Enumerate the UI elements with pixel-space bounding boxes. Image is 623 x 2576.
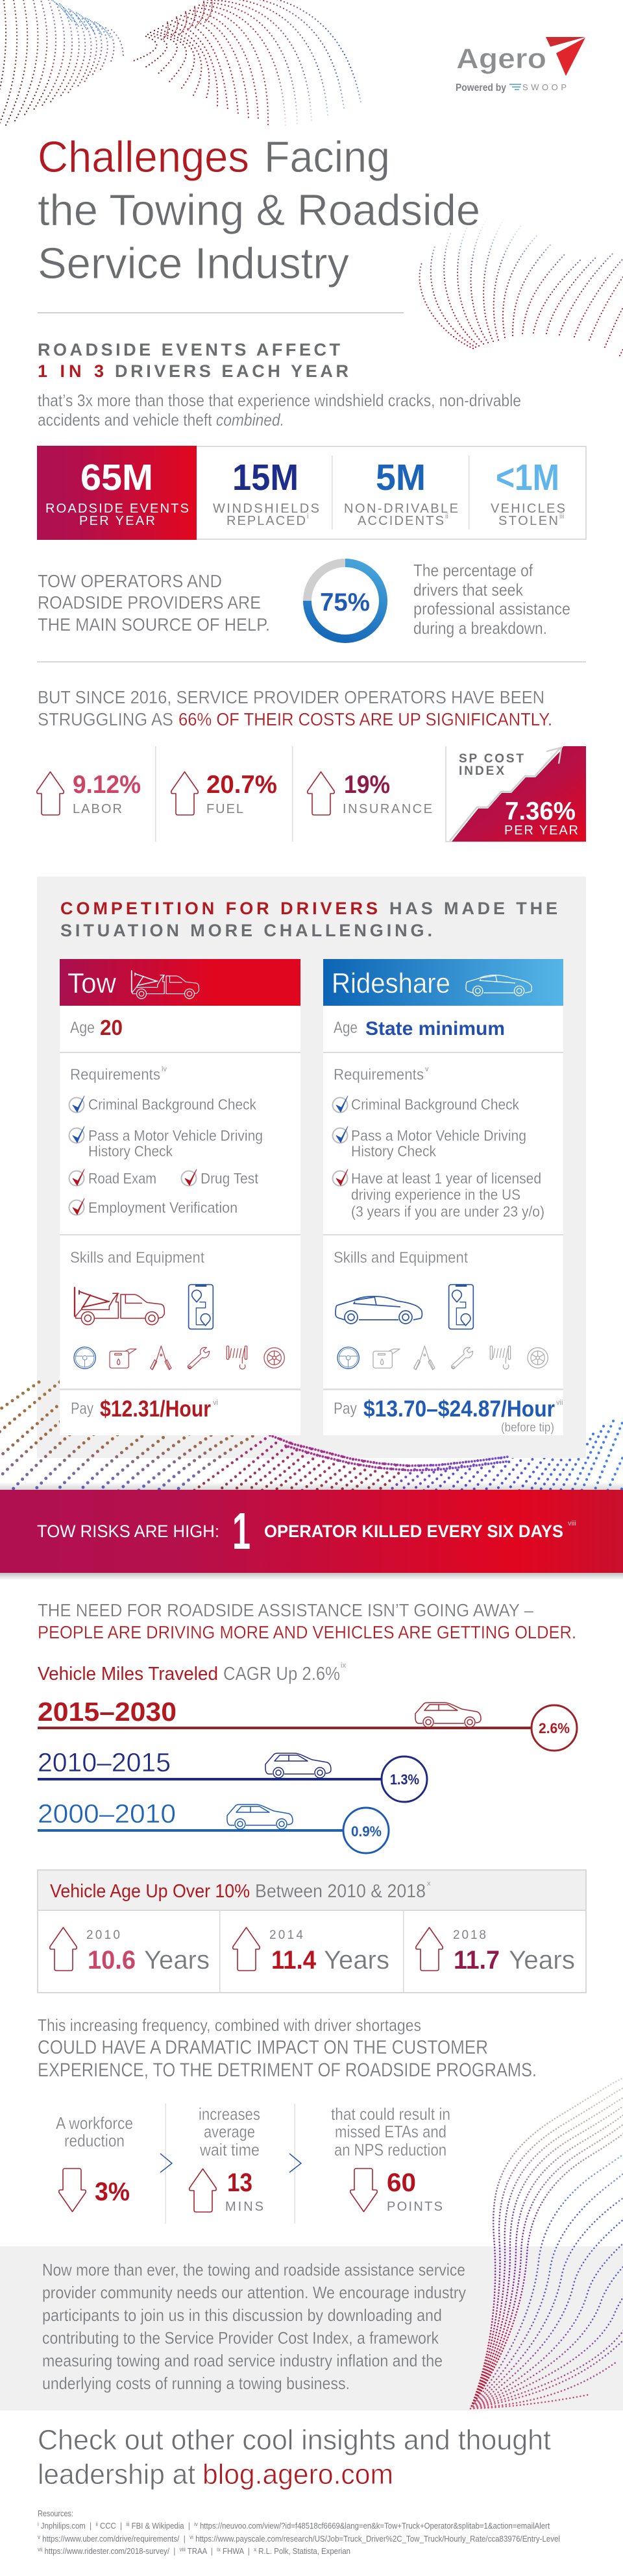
title: Service Industry [38,239,349,288]
age stat: 2010: Years [144,1946,210,1975]
text: percentage of drivers: The percentage of [413,561,533,580]
rideshare pay [334,1396,563,1435]
rideshare age: State minimum [365,1018,505,1039]
tow skills and equipment: Skills and Equipment [70,1249,204,1267]
cost stat: labor [37,771,141,816]
stat: 15M: 15M [232,457,299,498]
tow requirements: History Check [88,1143,173,1160]
age stat: 2014: Years [324,1946,389,1975]
age stat: 2010: 2010 [86,1928,120,1942]
footnotes: resources: x [254,2546,256,2553]
rideshare requirements [332,1065,544,1220]
footnotes: resources: TRAA | [186,2546,217,2556]
stat: 5M [344,457,458,528]
cost stat: insurance [308,771,432,816]
chart row: 2010-2015: 1.3% [390,1771,419,1788]
text: closing paragraph: Now more than ever, the towing and roadside assistance service [42,2260,465,2279]
impact: NPS points: 60 [387,2169,416,2197]
heading: need for roadside assistance: THE NEED FOR ROADSIDE ASSISTANCE ISN’T GOING AWAY – [38,1600,533,1620]
panel: competition for drivers background [37,877,586,1458]
impact: wait time: increases [199,2104,260,2124]
heading: roadside events affect 1 in 3: 1 IN 3 [38,361,104,381]
stat: 15M: i [307,513,308,520]
tow age: 20 [100,1015,123,1039]
footnotes: resources: i [38,2521,39,2527]
panel patch [509,1418,586,1458]
age stat: 2018 [416,1927,575,1975]
age stat: 2014: 2014 [269,1928,303,1942]
vehicle age heading: Vehicle Age Up Over 10% [50,1881,250,1902]
chart row: 2015-2030: 2015–2030 [38,1697,177,1727]
banner: tow risks are high: 1 [232,1502,250,1560]
tow requirements: Drug Test [201,1170,259,1187]
text: tow operators main source of help: TOW OPERATORS AND [38,571,222,591]
panel: closing band [0,2246,623,2411]
title [38,132,480,288]
call to action: blog link: blog.agero.com [202,2459,393,2490]
text: closing paragraph: measuring towing and road service industry inflation and the [42,2351,443,2370]
stat: 65M: ROADSIDE EVENTS [45,502,189,516]
text: tow operators main source of help [38,571,270,635]
panel: vehicle age [38,1870,586,1993]
footnotes: resources: ii [95,2521,98,2527]
cost stat: labor: LABOR [73,802,122,816]
text: tow operators main source of help: ROADSIDE PROVIDERS ARE [38,592,261,613]
age stat: 2014: 11.4 [271,1946,317,1975]
text: dramatic impact on customer experience: COULD HAVE A DRAMATIC IMPACT ON THE CUSTOMER [38,2037,488,2058]
cost stat: insurance: 19% [344,771,390,799]
logo: Agero, powered by Swoop: SWOOP [522,82,567,92]
wave fade overlay [279,68,389,136]
vehicle age heading: Between 2010 & 2018 [255,1881,426,1902]
footnotes: resources: ix [217,2546,221,2553]
rideshare pay: (before tip) [501,1421,554,1435]
rideshare pay: vii [556,1399,563,1407]
rideshare skills and equipment [334,1249,548,1370]
stat: 5M: ii [445,513,448,520]
tow skills and equipment [70,1249,284,1370]
cost stat: labor: 9.12% [73,771,141,799]
decorative dotted wave: right of title [420,217,623,356]
stat: 5M: 5M [376,457,426,498]
age stat: 2018: Years [509,1946,575,1975]
rideshare requirements: v [425,1065,429,1073]
stat: 65M [45,457,189,528]
chart heading: vehicle miles traveled [38,1662,346,1684]
text: percentage of drivers: during a breakdown. [413,618,547,638]
stat: 65M: PER YEAR [79,514,155,528]
intro text: that’s 3x more than those that experience windshield cracks, non-drivable [38,391,521,410]
banner: tow risks are high: OPERATOR KILLED EVERY SIX DAYS [264,1522,563,1541]
donut chart: 75% [308,563,383,638]
footnotes: resources: R.L. Polk, Statista, Experian [256,2546,350,2556]
shadow below banner [0,1573,623,1580]
footnotes: resources: https://www.ridester.com/2018-survey/ | [42,2546,180,2556]
heading: need for roadside assistance: PEOPLE ARE DRIVING MORE AND VEHICLES ARE GETTING OLDER. [38,1622,576,1642]
donut chart: 75%: 75% [320,589,370,616]
rideshare requirements: History Check [351,1143,436,1160]
footnotes: resources: CCC | [98,2521,126,2531]
footnotes: resources: iv [194,2521,198,2527]
logo: Agero, powered by Swoop: Powered by [456,82,506,93]
call to action: blog link: Check out other cool insights and thought [38,2424,551,2456]
tow requirements [69,1065,263,1216]
tow requirements: Road Exam [88,1170,156,1187]
text: percentage of drivers: drivers that seek [413,580,524,600]
stat: 15M: WINDSHIELDS [213,502,319,516]
decorative dotted wave: band above banner [0,1382,623,1492]
stat: under 1M [491,457,565,528]
chart: SP cost index staircase: SP COST [459,752,524,766]
impact: wait time: average [204,2122,255,2141]
heading: need for roadside assistance [38,1600,576,1642]
impact: wait time: wait time [199,2140,260,2159]
tow age: Age [70,1019,95,1037]
heading: competition for drivers: COMPETITION FOR DRIVERS [60,899,378,918]
title: Facing [264,132,390,182]
intro text [38,391,521,430]
tow requirements: iv [162,1065,167,1073]
stat: under 1M: STOLEN [498,514,558,528]
rideshare pay: $13.70–$24.87/Hour [363,1396,555,1422]
vehicle age heading [50,1880,431,1902]
tow header [60,959,300,1006]
chart row: 2000-2010: 2000–2010 [38,1799,176,1829]
cost stat: fuel: FUEL [206,802,243,816]
footnotes: resources: vi [189,2534,193,2540]
age stat: 2010: 10.6 [88,1946,136,1975]
stat: 15M: REPLACED [226,514,306,528]
vehicle age heading: x [427,1880,431,1888]
rideshare requirements: Pass a Motor Vehicle Driving [351,1127,526,1144]
text: closing paragraph [42,2260,466,2393]
tow age [70,1015,123,1039]
rideshare age: Age [334,1019,358,1037]
rideshare pay: Pay [334,1400,357,1418]
tow requirements: Requirements [70,1066,160,1084]
logo: Agero, powered by Swoop: Agero [456,43,546,75]
chart row: 2000-2010 [38,1799,389,1853]
rideshare requirements: Criminal Background Check [351,1096,519,1113]
rideshare header: Rideshare [332,967,450,999]
stat: 5M: NON-DRIVABLE [344,502,458,516]
heading: since 2016 costs up: BUT SINCE 2016, SERVICE PROVIDER OPERATORS HAVE BEEN [38,687,544,707]
tow requirements: Criminal Background Check [88,1096,256,1113]
rideshare skills and equipment: Skills and Equipment [334,1249,468,1267]
age stat: 2018: 2018 [453,1928,486,1942]
impact: NPS points: that could result in [331,2104,450,2124]
tow pay: Pay [71,1400,93,1418]
text: dramatic impact on customer experience [38,2015,537,2081]
footnotes: resources: FBI & Wikipedia | [130,2521,194,2531]
text: dramatic impact on customer experience: This increasing frequency, combined with driver shortages [38,2015,421,2035]
chart row: 2015-2030: 2.6% [539,1720,570,1736]
stat: 65M: 65M [80,457,153,498]
impact: NPS points: missed ETAs and [335,2122,446,2141]
footnotes: resources: iii [126,2521,130,2527]
footnotes: resources: https://neuvoo.com/view/?id=f48518cf6669&lang=en&k=Tow+Truck+Operator&splitab=1&action=emailAlert [198,2521,550,2531]
footnotes: resources: viii [180,2546,186,2553]
impact: wait time [189,2104,263,2214]
heading: since 2016 costs up: STRUGGLING AS [38,709,173,729]
heading: competition for drivers: HAS MADE THE [389,899,557,918]
text: closing paragraph: underlying costs of running a towing business. [42,2374,350,2393]
chart heading: vehicle miles traveled: CAGR Up 2.6% [223,1664,340,1684]
text: tow operators main source of help: THE MAIN SOURCE OF HELP. [38,614,270,635]
chart: SP cost index staircase [446,746,586,842]
tow requirements: Pass a Motor Vehicle Driving [88,1127,263,1144]
cost stat: fuel: 20.7% [206,771,277,799]
decorative dotted wave: bottom right [470,2073,623,2409]
footnotes: resources: vii [38,2546,42,2553]
card: rideshare column [323,959,563,1435]
chart row: 2010-2015 [38,1747,427,1802]
call to action: blog link [38,2424,551,2490]
chart heading: vehicle miles traveled: ix [341,1662,346,1670]
impact: NPS points: an NPS reduction [334,2140,446,2159]
rideshare requirements: (3 years if you are under 23 y/o) [351,1203,544,1220]
tow header: Tow [67,967,116,999]
footnotes: resources: v [38,2534,40,2540]
chevron arrow [289,2154,301,2172]
cost stat: insurance: INSURANCE [343,802,432,816]
footnotes: resources [38,2509,560,2556]
chart row: 2015-2030 [38,1697,577,1751]
impact: NPS points [331,2104,450,2214]
chart row: 2010-2015: 2010–2015 [38,1747,171,1777]
title: the Towing & Roadside [38,186,480,235]
stat: 15M [213,457,319,528]
footnotes: resources: Resources: [38,2509,73,2518]
heading: competition for drivers: SITUATION MORE CHALLENGING. [60,921,432,940]
rideshare requirements: driving experience in the US [351,1186,520,1203]
panel: annual events stats [37,446,586,540]
logo: Agero, powered by Swoop [456,37,585,93]
text: closing paragraph: contributing to the Service Provider Cost Index, a framework [42,2328,439,2348]
card: tow column [60,959,300,1435]
banner: tow risks are high: TOW RISKS ARE HIGH: [37,1522,219,1541]
rideshare requirements: Have at least 1 year of licensed [351,1170,541,1187]
tow pay: vi [213,1399,218,1407]
impact: workforce reduction [56,2113,133,2211]
chart: SP cost index staircase: PER YEAR [504,823,578,838]
age stat: 2014 [233,1927,389,1975]
heading: roadside events affect 1 in 3: DRIVERS EACH YEAR [115,361,348,381]
heading: competition for drivers [60,899,557,940]
age stat: 2018: 11.7 [454,1946,500,1975]
impact: workforce reduction: A workforce [56,2113,133,2133]
chart heading: vehicle miles traveled: Vehicle Miles Traveled [38,1664,218,1684]
intro text: accidents and vehicle theft combined. [38,410,284,430]
stat: under 1M: VEHICLES [491,502,565,516]
stat: under 1M: iii [559,513,564,520]
banner: tow risks are high: viii [568,1520,576,1527]
rideshare requirements: Requirements [334,1066,424,1084]
text: dramatic impact on customer experience: EXPERIENCE, TO THE DETRIMENT OF ROADSIDE PROGRAMS. [38,2060,537,2081]
decorative dotted wave: top left [0,0,361,130]
stat: under 1M: <1M [496,457,559,498]
age stat: 2010 [50,1927,210,1975]
heading: since 2016 costs up [38,687,552,729]
impact: workforce reduction: 3% [95,2178,130,2206]
shadow above banner [0,1482,623,1490]
impact: workforce reduction: reduction [64,2131,125,2150]
impact: NPS points: POINTS [387,2200,443,2214]
heading: roadside events affect 1 in 3 [38,340,348,381]
footnotes: resources: https://www.payscale.com/research/US/Job=Truck_Driver%2C_Tow_Truck/Hourly_Rate/cca83976/Entry-Level [193,2534,560,2544]
impact: wait time: MINS [225,2200,263,2214]
chart: SP cost index staircase: INDEX [459,764,504,778]
tow requirements: Employment Verification [88,1199,238,1216]
text: closing paragraph: participants to join us in this discussion by downloading and [42,2305,442,2325]
stat: 5M: ACCIDENTS [358,514,444,528]
banner: tow risks are high [0,1490,623,1573]
rideshare header [323,959,563,1006]
text: percentage of drivers [413,561,570,638]
footnotes: resources: FHWA | [221,2546,254,2556]
call to action: blog link: leadership at [38,2459,195,2490]
heading: roadside events affect 1 in 3: ROADSIDE EVENTS AFFECT [38,340,340,359]
text: percentage of drivers: professional assistance [413,599,570,618]
heading: since 2016 costs up: 66% OF THEIR COSTS ARE UP SIGNIFICANTLY. [178,709,552,729]
chart: SP cost index staircase: 7.36% [505,797,576,825]
chart row: 2000-2010: 0.9% [351,1823,382,1840]
title: Challenges [38,132,249,182]
chevron arrow [160,2154,172,2172]
footnotes: resources: https://www.uber.com/drive/requirements/ | [40,2534,189,2544]
text: closing paragraph: provider community needs our attention. We encourage industry [42,2283,466,2302]
impact: wait time: 13 [227,2169,252,2197]
cost stat: fuel [171,771,277,816]
footnotes: resources: Jnphilips.com | [39,2521,95,2531]
tow pay: $12.31/Hour [100,1396,211,1422]
